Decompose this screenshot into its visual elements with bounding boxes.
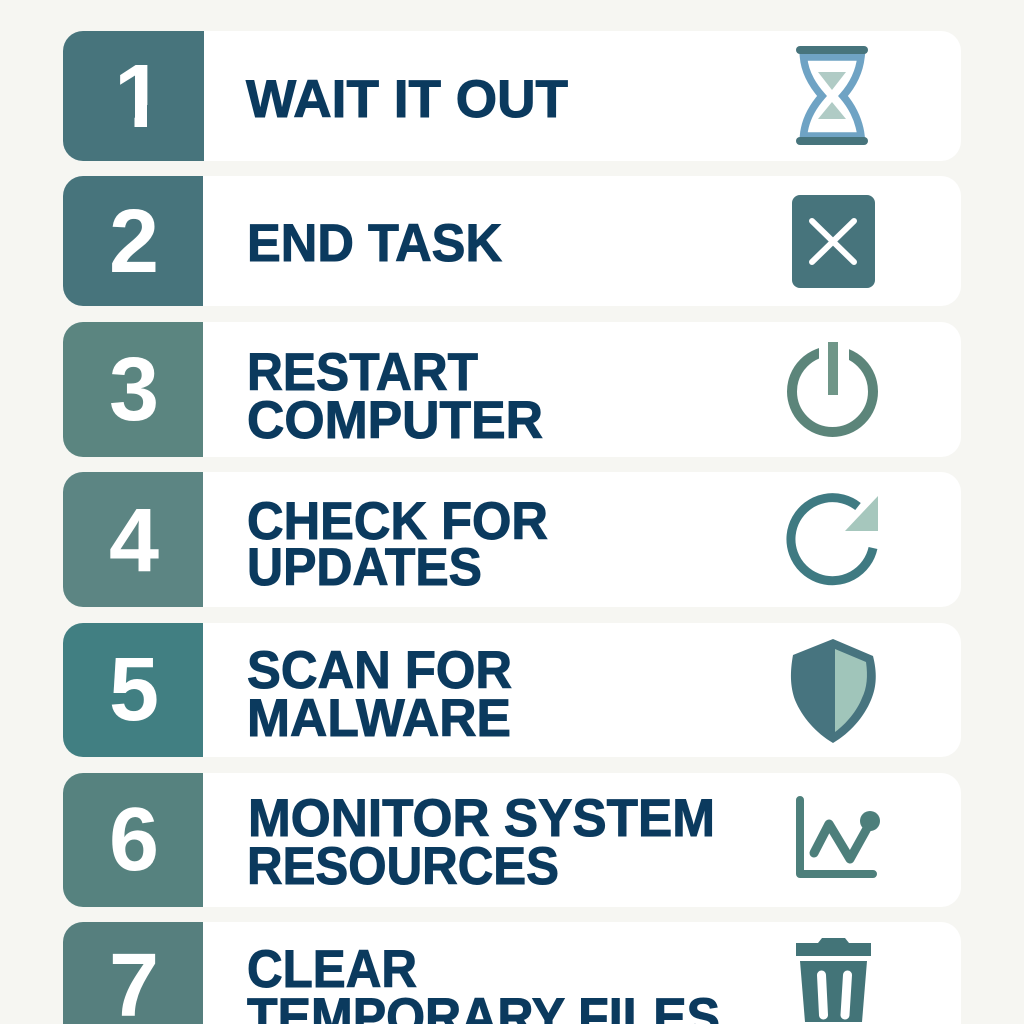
number panel 6 bbox=[63, 773, 203, 907]
number 4: 4 bbox=[109, 491, 159, 591]
heading: restart computer bbox=[247, 343, 543, 450]
icon: trash can bbox=[796, 938, 871, 1022]
heading: end task: END TASK bbox=[247, 214, 502, 273]
heading: monitor system resources: RESOURCES bbox=[247, 837, 559, 896]
heading: wait it out: WAIT IT OUT bbox=[246, 70, 568, 129]
step 5: scan for malware bbox=[63, 623, 961, 757]
icon: close box bbox=[792, 195, 875, 288]
step 7: clear temporary files bbox=[63, 922, 961, 1024]
step 1: wait it out bbox=[63, 31, 961, 161]
heading: restart computer: COMPUTER bbox=[247, 391, 543, 450]
step 2: end task bbox=[63, 176, 961, 306]
number panel 4 bbox=[63, 472, 203, 607]
heading: check for updates: CHECK FOR bbox=[247, 492, 548, 551]
heading: check for updates: UPDATES bbox=[247, 538, 482, 597]
number panel 7 bbox=[63, 922, 203, 1024]
heading: monitor system resources: MONITOR SYSTEM bbox=[248, 789, 715, 848]
icon: line chart bbox=[800, 800, 880, 874]
icon: refresh bbox=[791, 496, 878, 581]
step 3: restart computer bbox=[63, 322, 961, 457]
heading: monitor system resources bbox=[247, 789, 715, 896]
number panel 5 bbox=[63, 623, 203, 757]
number panel 3 bbox=[63, 322, 203, 457]
step 6: monitor system resources bbox=[63, 773, 961, 907]
number panel 2 bbox=[63, 176, 203, 306]
number 2: 2 bbox=[109, 192, 159, 292]
number 6: 6 bbox=[109, 790, 159, 890]
heading: restart computer: RESTART bbox=[247, 343, 478, 402]
heading: scan for malware: MALWARE bbox=[247, 689, 511, 748]
number 1: 1 bbox=[114, 47, 164, 147]
icon: shield bbox=[791, 639, 876, 743]
number 3: 3 bbox=[109, 340, 159, 440]
heading: clear temporary files: CLEAR bbox=[247, 940, 417, 999]
heading: scan for malware bbox=[247, 641, 512, 748]
icon: power bbox=[792, 342, 873, 432]
heading: scan for malware: SCAN FOR bbox=[247, 641, 512, 700]
heading: clear temporary files bbox=[247, 940, 720, 1024]
step 4: check for updates bbox=[63, 472, 961, 607]
icon: hourglass bbox=[796, 46, 868, 145]
number 5: 5 bbox=[109, 640, 159, 740]
heading: check for updates bbox=[247, 492, 548, 597]
number panel 1 bbox=[63, 31, 204, 161]
